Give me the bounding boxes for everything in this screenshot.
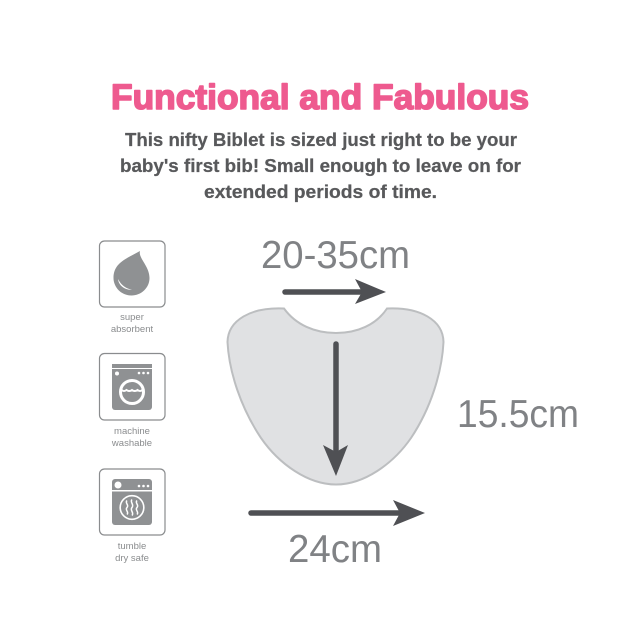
label: super absorbent: absorbent: [111, 324, 153, 335]
icon: washing machine: [100, 354, 165, 420]
title: Functional and Fabulous: [111, 78, 529, 117]
icon: water drop: [100, 241, 165, 307]
feature: machine washable: [100, 354, 165, 449]
description text: [120, 129, 521, 202]
label: bib width: 24cm: [288, 528, 382, 571]
arrow: neck width: [285, 279, 386, 304]
arrow: bib width: [251, 500, 425, 526]
label: tumble dry safe: tumble: [118, 541, 146, 552]
feature: super absorbent: [100, 241, 165, 335]
label: super absorbent: super: [120, 312, 144, 323]
label: machine washable: machine: [114, 426, 150, 437]
description text: baby's first bib! Small enough to leave on for: [120, 155, 521, 176]
bib shape: [228, 308, 444, 484]
arrow: bib height: [323, 344, 348, 476]
feature: tumble dry safe: [100, 469, 165, 564]
description text: extended periods of time.: [204, 181, 437, 202]
description text: This nifty Biblet is sized just right to be your: [125, 129, 517, 150]
icon: tumble dryer: [100, 469, 165, 535]
label: neck width: 20-35cm: [261, 234, 410, 277]
label: tumble dry safe: dry safe: [115, 553, 149, 564]
label: bib height: 15.5cm: [457, 393, 579, 436]
label: machine washable: washable: [111, 438, 152, 449]
